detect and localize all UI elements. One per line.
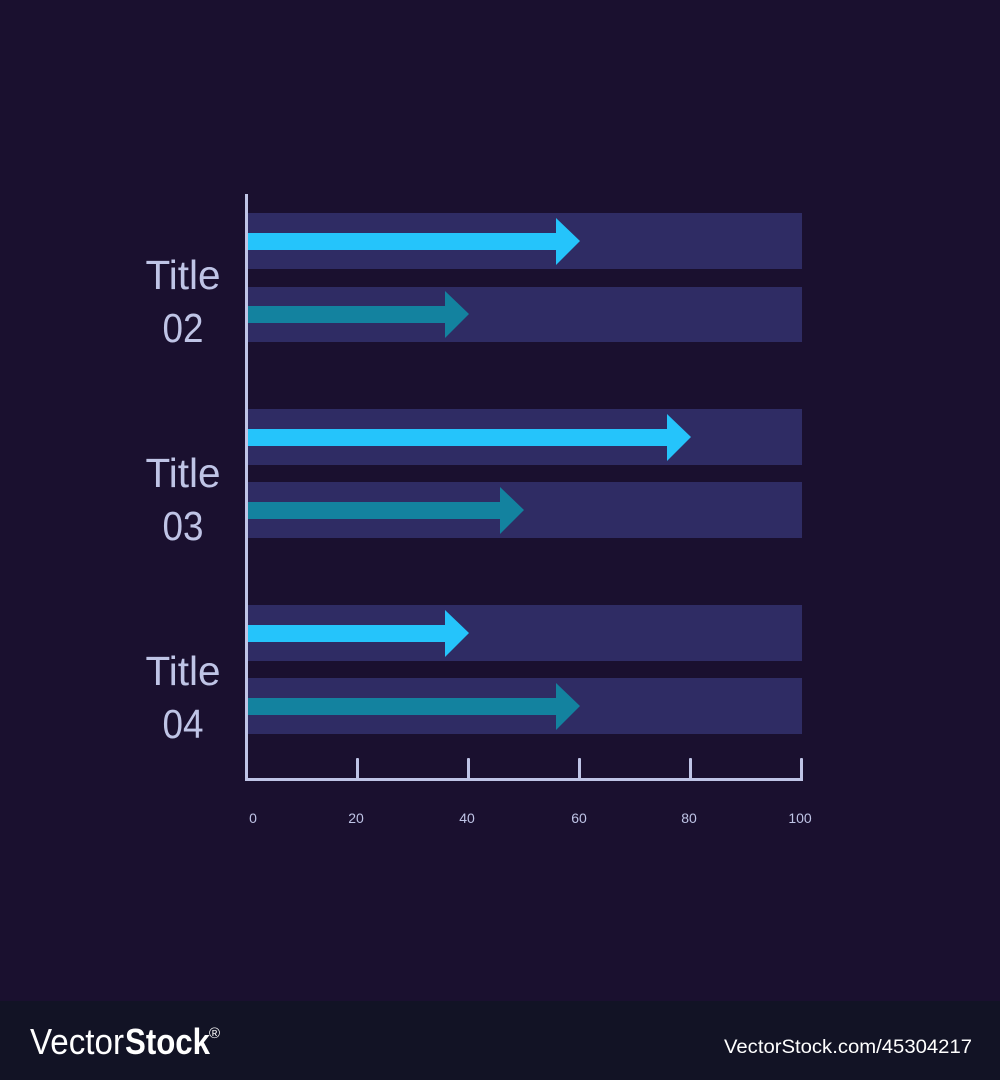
registered mark: ® xyxy=(209,1025,220,1042)
label: Title 03 xyxy=(146,450,220,549)
x-axis value labels: 40 xyxy=(459,810,475,826)
label: Title 03: 03 xyxy=(162,503,204,549)
arrow: Title 04 series B, value 60 xyxy=(248,683,580,730)
arrow: Title 02 series A, value 60 xyxy=(248,218,580,265)
x-axis value labels: 20 xyxy=(348,810,364,826)
footer logo xyxy=(30,1021,211,1062)
arrow: Title 04 series A, value 40 xyxy=(248,610,469,657)
x-axis value labels: 0 xyxy=(249,810,257,826)
x-axis value labels: 80 xyxy=(681,810,697,826)
label: Title 02: Title xyxy=(146,252,220,298)
label: Title 04 xyxy=(146,648,220,747)
footer logo: Stock xyxy=(125,1021,211,1062)
label: Title 03: Title xyxy=(146,450,220,496)
footer url: VectorStock.com/45304217 xyxy=(724,1037,972,1058)
chart axes and ticks xyxy=(245,194,803,781)
watermark footer bar xyxy=(0,1001,1000,1080)
arrow: Title 03 series B, value 50 xyxy=(248,487,524,534)
footer logo: Vector xyxy=(30,1021,124,1062)
arrow: Title 03 series A, value 80 xyxy=(248,414,691,461)
group: Title 02 bars xyxy=(248,213,802,342)
group: Title 04 bars xyxy=(248,605,802,734)
label: Title 04: Title xyxy=(146,648,220,694)
label: Title 04: 04 xyxy=(162,701,204,747)
label: Title 02: 02 xyxy=(162,305,204,351)
x-axis value labels: 60 xyxy=(571,810,587,826)
x-axis value labels: 100 xyxy=(788,810,812,826)
group: Title 03 bars xyxy=(248,409,802,538)
arrow: Title 02 series B, value 40 xyxy=(248,291,469,338)
x-axis value labels xyxy=(249,810,812,826)
label: Title 02 xyxy=(146,252,220,351)
